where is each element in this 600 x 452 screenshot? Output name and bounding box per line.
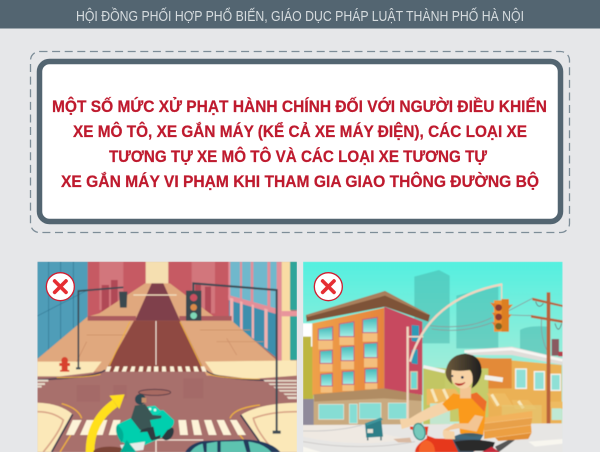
sidewalks: [37, 283, 297, 379]
fire hydrant: [59, 357, 70, 372]
delivery rider: [400, 354, 487, 436]
street lamp: [408, 284, 502, 438]
prohibition icon: [46, 273, 74, 301]
near right corner: [230, 403, 297, 452]
road patches: [77, 378, 203, 402]
pizza boxes: [484, 411, 532, 441]
title text: TƯƠNG TỰ XE MÔ TÔ VÀ CÁC LOẠI XE TƯƠNG TỰ: [109, 147, 488, 166]
distant towers: [414, 270, 548, 355]
back shops: [423, 347, 563, 425]
utility pole: [531, 292, 563, 431]
near crosswalk: [66, 420, 246, 435]
right traffic light: [186, 283, 281, 434]
manhole: [139, 389, 171, 395]
prohibition icon: [314, 273, 342, 301]
mailbox: [365, 418, 383, 440]
window spandrels: [318, 333, 377, 393]
right glass building: [228, 262, 297, 362]
header text: HỘI ĐỒNG PHỐI HỢP PHỔ BIẾN, GIÁO DỤC PHÁP LUẬT THÀNH PHỐ HÀ NỘI: [76, 7, 524, 25]
left traffic light: [76, 287, 127, 369]
title text: [52, 96, 547, 191]
windows: [318, 317, 377, 386]
panel: intersection scene: [37, 262, 297, 452]
wires: [430, 298, 547, 350]
near left corner: [37, 403, 82, 452]
far crosswalk: [105, 366, 207, 372]
car roof: [185, 439, 281, 452]
brick building: [306, 291, 430, 425]
background buildings: [87, 262, 230, 318]
header bar: [0, 0, 600, 28]
scooter: [400, 418, 515, 452]
left glass building: [37, 262, 88, 359]
title text: MỘT SỐ MỨC XỬ PHẠT HÀNH CHÍNH ĐỐI VỚI NGƯỜI ĐIỀU KHIỂN: [52, 96, 547, 116]
panel: delivery rider scene: [303, 262, 563, 452]
title panel: [30, 52, 570, 232]
side crosswalks: [37, 380, 297, 399]
pavement: [303, 423, 563, 452]
left neighbor building: [303, 337, 315, 425]
title text: XE MÔ TÔ, XE GẮN MÁY (KỂ CẢ XE MÁY ĐIỆN), CÁC LOẠI XE: [73, 122, 527, 141]
yellow arrow: [90, 394, 125, 452]
far road: [105, 321, 205, 372]
title text: XE GẮN MÁY VI PHẠM KHI THAM GIA GIAO THÔNG ĐƯỜNG BỘ: [61, 172, 539, 191]
scooter rider: [93, 394, 174, 452]
hanging traffic light: [490, 299, 513, 332]
